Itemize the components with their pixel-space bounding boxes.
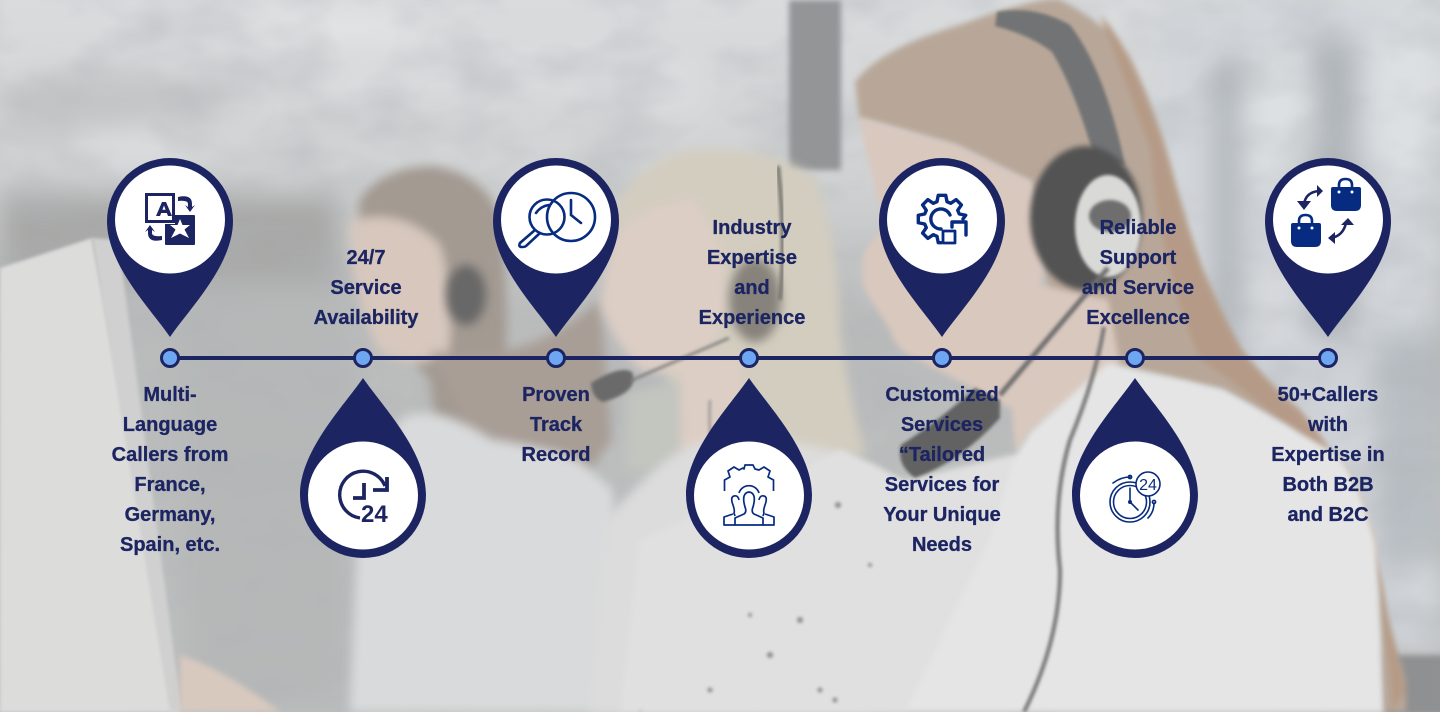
label: industry expertise — [699, 217, 805, 329]
label: 24/7 service — [314, 247, 418, 329]
drop 4: industry expertise — [686, 378, 812, 558]
label: customized services: Needs — [912, 534, 972, 556]
pin 5: customized services — [879, 158, 1005, 337]
drop 6: reliable support — [1072, 378, 1198, 558]
label: industry expertise: Industry — [713, 217, 791, 239]
label: industry expertise: and — [734, 277, 770, 299]
icon: gear with square — [918, 195, 966, 243]
label: reliable support — [1082, 217, 1194, 329]
label: multi-language: Callers from — [112, 444, 228, 466]
icon: stopwatch with 24 — [1110, 472, 1160, 522]
pin 3: proven track record — [493, 158, 619, 337]
drop 2: 24/7 — [300, 378, 426, 558]
label: industry expertise: Experience — [699, 307, 805, 329]
label: reliable support: and Service — [1082, 277, 1194, 299]
right agent hair — [855, 0, 1406, 712]
icon: 24 hour clock — [340, 471, 387, 518]
label: 50+ callers — [1271, 384, 1385, 526]
drop 2: 24/7: 24 — [361, 501, 388, 528]
label: multi-language: France, — [134, 474, 206, 496]
label: 50+ callers: Expertise in — [1271, 444, 1385, 466]
left agent — [350, 166, 625, 712]
icon: magnifier and clock — [519, 193, 595, 247]
label: customized services: Customized — [885, 384, 999, 406]
label: 50+ callers: Both B2B — [1282, 474, 1374, 496]
icon: bags with arrows — [1291, 179, 1361, 247]
label: 24/7 service: 24/7 — [347, 247, 385, 269]
label: proven track record — [522, 384, 590, 466]
label: customized services: Services for — [885, 474, 999, 496]
middle agent — [590, 149, 940, 712]
label: multi-language: Multi- — [143, 384, 197, 406]
label: customized services: “Tailored — [899, 444, 985, 466]
label: reliable support: Reliable — [1100, 217, 1176, 239]
label: 50+ callers: 50+Callers — [1278, 384, 1378, 406]
timeline line — [170, 356, 1328, 360]
right agent headset — [995, 10, 1125, 165]
label: 50+ callers: and B2C — [1287, 504, 1369, 526]
label: proven track record: Record — [522, 444, 590, 466]
label: 50+ callers: with — [1308, 414, 1348, 436]
icon: team with gear — [724, 465, 774, 525]
label: proven track record: Proven — [522, 384, 590, 406]
label: multi-language: Spain, etc. — [120, 534, 220, 556]
icon: translate — [145, 193, 195, 245]
timeline nodes — [162, 350, 1336, 366]
label: proven track record: Track — [530, 414, 582, 436]
label: industry expertise: Expertise — [707, 247, 797, 269]
label: customized services: Services — [901, 414, 983, 436]
label: 24/7 service: Availability — [314, 307, 418, 329]
pin 7: callers b2b b2c — [1265, 158, 1391, 337]
monitor — [0, 238, 180, 712]
right agent face and neck — [859, 118, 1120, 454]
dark window column — [789, 0, 841, 170]
label: multi-language: Language — [123, 414, 217, 436]
label: customized services — [883, 384, 1001, 556]
label: reliable support: Support — [1100, 247, 1176, 269]
drop 6: reliable support: 24 — [1139, 477, 1157, 494]
label: customized services: Your Unique — [883, 504, 1001, 526]
label: multi-language — [112, 384, 228, 556]
label: 24/7 service: Service — [330, 277, 402, 299]
label: reliable support: Excellence — [1086, 307, 1190, 329]
label: multi-language: Germany, — [125, 504, 215, 526]
right agent shirt — [620, 363, 1383, 712]
pin 1: multi-language — [107, 158, 233, 337]
